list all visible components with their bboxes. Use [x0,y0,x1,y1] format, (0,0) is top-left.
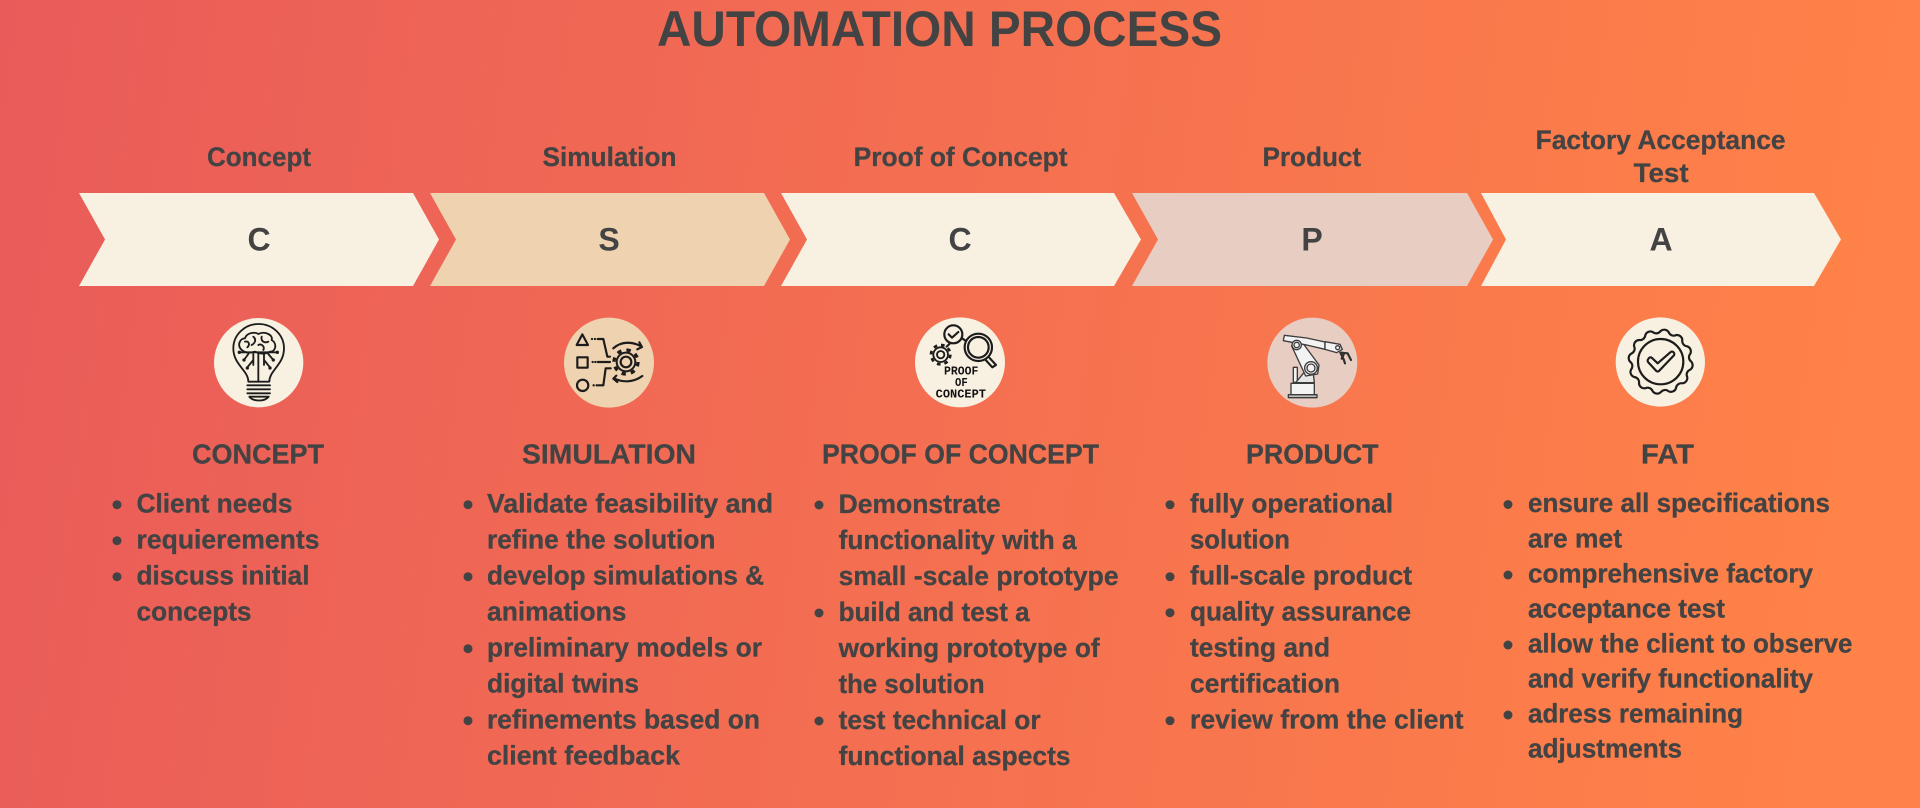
chevron: A factory acceptance test [1481,193,1841,286]
bullet list: simulation: client feedback [487,741,681,771]
bullet list: proof of concept [814,489,1119,771]
bullet list: FAT: comprehensive factory [1528,558,1813,588]
heading: CONCEPT: CONCEPT [192,438,324,469]
bullet list: FAT: allow the client to observe [1528,628,1852,658]
bullet list: simulation: preliminary models or [487,633,762,663]
bullet list: simulation: digital twins [487,669,639,699]
chevron: S simulation: S [598,222,620,258]
bullet list: FAT: adress remaining [1528,698,1743,728]
icon: simulation shapes and gear [564,318,654,408]
chevron: C concept: C [247,222,271,258]
bullet list: concept: discuss initial [136,561,310,591]
bullet list: FAT: acceptance test [1528,594,1725,624]
bullet list: simulation: refinements based on [487,705,760,735]
chevron: P product [1132,193,1493,286]
label: Factory Acceptance Test: Test [1634,158,1689,188]
bullet list: product: testing and [1190,633,1330,663]
bullet list: FAT: adjustments [1528,734,1682,764]
bullet list: simulation: refine the solution [487,525,716,555]
bullet list: proof of concept: test technical or [839,705,1041,735]
bullet list: FAT: ensure all specifications [1528,488,1830,518]
bullet list: FAT [1504,488,1852,764]
chevron process bar [79,193,1841,286]
heading: PRODUCT: PRODUCT [1246,438,1378,469]
bullet list: product [1166,489,1464,735]
heading: FAT: FAT [1641,438,1694,469]
icon: proof of concept: CONCEPT [936,388,986,402]
step labels [207,125,1786,188]
chevron: C concept [79,193,439,286]
icon: proof of concept: PROOF [944,364,978,378]
chevron: S simulation [430,193,790,286]
bullet list: product: fully operational [1190,489,1393,519]
title: AUTOMATION PROCESS [657,1,1222,57]
bullet list: FAT: and verify functionality [1528,664,1813,694]
label: Simulation: Simulation [542,142,676,172]
icon: proof of concept [915,317,1005,407]
icon: light bulb with brain [214,318,303,407]
bullet list: proof of concept: functionality with a [839,525,1078,555]
icon: proof of concept: OF [955,376,968,390]
bullet list: concept: requierements [136,525,320,555]
bullet list: proof of concept: build and test a [839,597,1031,627]
column headings [192,438,1694,469]
chevron: P product: P [1301,222,1323,258]
bullet list: simulation: Validate feasibility and [487,489,773,519]
chevron: A factory acceptance test: A [1649,222,1673,258]
icon: approval badge [1616,317,1705,407]
label: Proof of Concept: Proof of Concept [854,142,1068,172]
bullet list: product: full-scale product [1190,561,1412,591]
bullet list: proof of concept: small -scale prototype [839,561,1119,591]
bullet list: product: solution [1190,525,1290,555]
label: Factory Acceptance Test [1536,125,1786,188]
label: Factory Acceptance Test: Factory Acceptance [1536,125,1786,155]
heading: PROOF OF CONCEPT: PROOF OF CONCEPT [822,438,1099,469]
bullet list: product: quality assurance [1190,597,1411,627]
bullet list: FAT: are met [1528,524,1622,554]
chevron: C proof of concept [781,193,1141,286]
bullet list: proof of concept: working prototype of [838,633,1101,663]
bullet list: concept: Client needs [136,489,292,519]
label: Product: Product [1262,142,1361,172]
bullet list: concept: concepts [136,597,252,627]
icon: robot arm [1267,318,1357,408]
bullet list: proof of concept: Demonstrate [839,489,1001,519]
chevron: C proof of concept: C [948,222,972,258]
bullet list: product: review from the client [1190,705,1464,735]
heading: SIMULATION: SIMULATION [522,438,696,469]
bullet list: simulation: animations [487,597,626,627]
label: Concept: Concept [207,142,311,172]
bullet list: simulation [464,489,773,771]
bullet list: proof of concept: the solution [839,669,985,699]
bullet list: product: certification [1190,669,1340,699]
bullet list: simulation: develop simulations & [487,561,764,591]
bullet list: proof of concept: functional aspects [839,741,1071,771]
bullet list: concept [112,489,320,627]
